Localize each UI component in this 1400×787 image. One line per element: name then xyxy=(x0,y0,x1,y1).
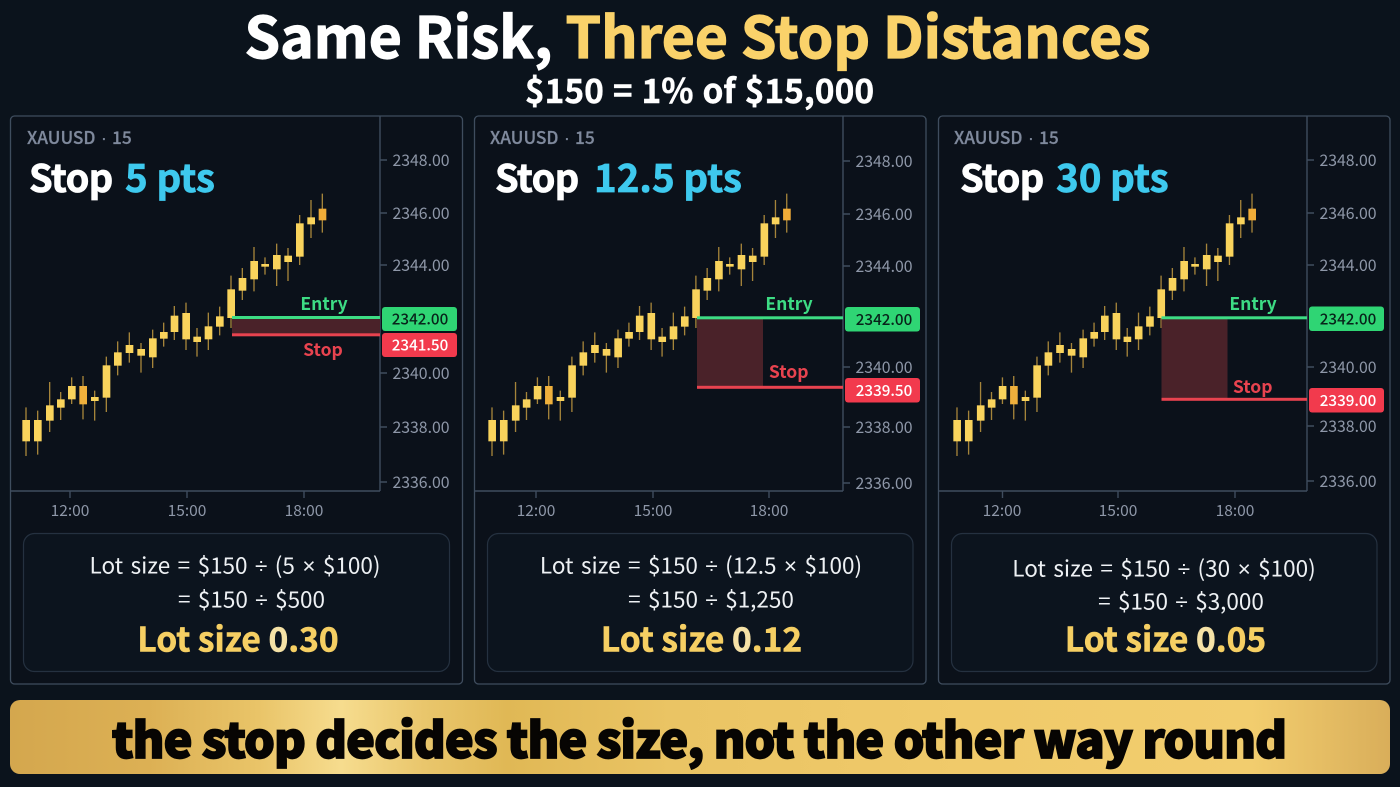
formula box: = $150 ÷ $1,250 xyxy=(628,582,794,614)
entry line xyxy=(1162,316,1307,319)
price axis labels xyxy=(392,148,450,493)
time axis labels xyxy=(517,499,788,521)
chart symbol: 15 xyxy=(575,124,595,149)
candlesticks xyxy=(488,194,791,456)
time axis labels: 12:00 xyxy=(517,499,555,521)
formula box: Lot size 0.05 xyxy=(1065,612,1266,662)
stop heading: 30 pts xyxy=(1056,148,1169,204)
price axis labels: 2340.00 xyxy=(856,355,912,378)
candlesticks xyxy=(22,194,326,456)
price axis labels: 2340.00 xyxy=(392,361,450,384)
stop price tag xyxy=(845,378,920,402)
formula box: Lot size = $150 ÷ (5 × $100) xyxy=(90,548,380,580)
stop heading: 12.5 pts xyxy=(594,148,742,204)
chart axes xyxy=(938,116,1314,498)
risk zone xyxy=(232,318,380,335)
panel: stop 12.5 pts xyxy=(474,116,926,684)
risk zone xyxy=(697,318,763,387)
formula box: Lot size = $150 ÷ (12.5 × $100) xyxy=(540,548,862,580)
stop price tag xyxy=(1309,388,1384,412)
price axis labels: 2336.00 xyxy=(856,471,912,494)
time axis labels: 18:00 xyxy=(750,499,788,521)
formula box: Lot size = $150 ÷ (30 × $100) xyxy=(1012,552,1316,584)
stop price tag: 2339.50 xyxy=(856,379,912,401)
entry price tag xyxy=(1309,306,1384,331)
stop label: Stop xyxy=(303,337,343,362)
price axis labels: 2346.00 xyxy=(856,202,912,225)
price axis labels: 2348.00 xyxy=(856,149,912,172)
time axis labels: 15:00 xyxy=(168,499,206,521)
entry price tag: 2342.00 xyxy=(392,308,448,330)
chart symbol: XAUUSD xyxy=(490,124,559,149)
price axis labels: 2344.00 xyxy=(392,253,450,276)
chart symbol: · xyxy=(101,128,107,148)
stop price tag: 2339.00 xyxy=(1320,389,1376,411)
chart symbol: 15 xyxy=(112,124,132,149)
time axis labels: 12:00 xyxy=(983,499,1021,521)
candlesticks xyxy=(953,194,1256,456)
time axis labels: 18:00 xyxy=(1216,499,1254,521)
time axis labels: 15:00 xyxy=(634,499,672,521)
chart symbol: · xyxy=(1028,128,1034,148)
entry line xyxy=(232,316,380,319)
time axis labels xyxy=(983,499,1254,521)
entry price tag: 2342.00 xyxy=(856,308,912,330)
formula box xyxy=(488,534,913,672)
entry label: Entry xyxy=(765,291,813,316)
stop label: Stop xyxy=(769,359,809,384)
formula box xyxy=(952,534,1377,672)
formula box: Lot size 0.12 xyxy=(601,612,802,662)
price axis labels: 2344.00 xyxy=(856,254,912,277)
time axis labels: 18:00 xyxy=(285,499,323,521)
banner: the stop decides the size, not the other way round xyxy=(112,702,1287,772)
stop heading: Stop xyxy=(960,148,1044,203)
entry label: Entry xyxy=(300,291,348,316)
stop price tag xyxy=(382,333,457,357)
entry price tag xyxy=(382,307,457,331)
stop heading: Stop xyxy=(29,148,113,203)
price axis labels xyxy=(1320,148,1376,492)
chart symbol: 15 xyxy=(1039,124,1059,149)
price axis labels xyxy=(856,149,912,494)
price axis labels: 2348.00 xyxy=(1320,148,1376,171)
price axis labels: 2344.00 xyxy=(1320,253,1376,276)
price axis labels: 2348.00 xyxy=(392,148,450,171)
formula box: Lot size 0.30 xyxy=(137,612,339,662)
chart axes xyxy=(474,116,850,498)
time axis labels: 15:00 xyxy=(1099,499,1137,521)
stop price tag: 2341.50 xyxy=(392,334,448,356)
panel: stop 5 pts xyxy=(10,116,462,684)
subtitle: $150 = 1% of $15,000 xyxy=(525,64,874,113)
stop line xyxy=(232,333,380,336)
stop line xyxy=(1162,398,1307,401)
price axis labels: 2338.00 xyxy=(1320,414,1376,437)
chart symbol: · xyxy=(564,128,570,148)
formula box: = $150 ÷ $500 xyxy=(178,582,325,614)
entry price tag xyxy=(845,307,920,332)
chart symbol: XAUUSD xyxy=(27,124,96,149)
stop line xyxy=(697,386,843,389)
entry label: Entry xyxy=(1229,291,1277,316)
time axis labels xyxy=(51,499,323,521)
price axis labels: 2338.00 xyxy=(392,415,450,438)
price axis labels: 2340.00 xyxy=(1320,355,1376,378)
risk zone xyxy=(1162,318,1228,399)
stop heading: Stop xyxy=(495,148,579,203)
price axis labels: 2336.00 xyxy=(392,470,450,493)
entry price tag: 2342.00 xyxy=(1320,308,1376,330)
chart axes xyxy=(10,116,387,498)
panel: stop 30 pts xyxy=(938,116,1390,684)
price axis labels: 2346.00 xyxy=(392,201,450,224)
price axis labels: 2346.00 xyxy=(1320,201,1376,224)
entry line xyxy=(697,316,843,319)
price axis labels: 2336.00 xyxy=(1320,469,1376,492)
formula box xyxy=(24,534,450,672)
time axis labels: 12:00 xyxy=(51,499,89,521)
formula box: = $150 ÷ $3,000 xyxy=(1098,584,1264,616)
chart symbol: XAUUSD xyxy=(954,124,1023,149)
stop label: Stop xyxy=(1233,374,1273,399)
stop heading: 5 pts xyxy=(125,148,215,204)
price axis labels: 2338.00 xyxy=(856,415,912,438)
